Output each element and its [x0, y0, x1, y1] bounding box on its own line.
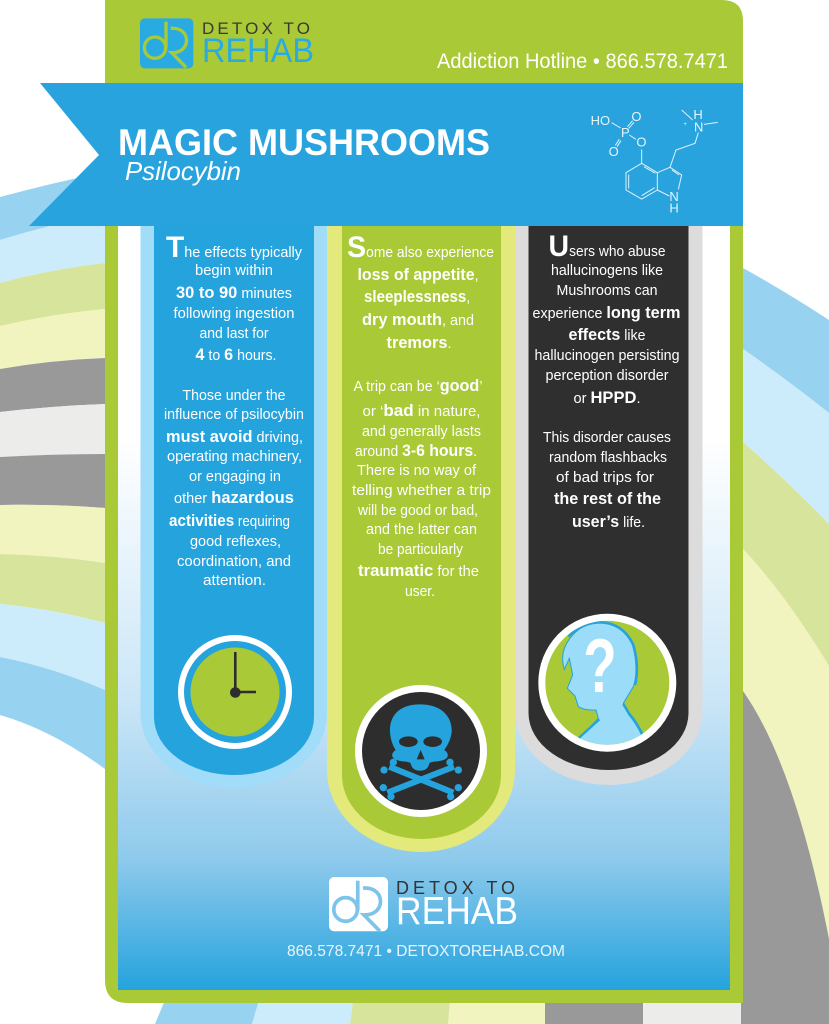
text: symptoms and trips: traumatic for the: [358, 562, 479, 580]
banner ribbon: [29, 83, 743, 226]
text: symptoms and trips: or ‘bad in nature,: [362, 402, 480, 420]
text: symptoms and trips: and generally lasts: [362, 424, 481, 440]
panel: long term effects column: [515, 226, 702, 785]
text: onset and duration: begin within: [195, 263, 273, 279]
text: onset and duration: good reflexes,: [190, 534, 281, 550]
text: onset and duration: 4 to 6 hours.: [196, 346, 276, 364]
text: onset and duration: coordination, and: [177, 554, 291, 570]
chemical structure of psilocybin: +: [683, 122, 687, 128]
text: onset and duration: influence of psilocybin: [164, 407, 304, 423]
chemical structure of psilocybin: H: [693, 107, 703, 122]
text: symptoms and trips: A trip can be ‘good’: [354, 377, 482, 395]
subtitle: Psilocybin: [125, 156, 241, 186]
text: HPPD: Mushrooms can: [556, 283, 658, 299]
text: onset and duration: The effects typically: [166, 231, 303, 264]
text: symptoms and trips: sleeplessness,: [364, 288, 470, 306]
text: symptoms and trips: around 3-6 hours.: [355, 442, 477, 460]
text: symptoms and trips: be particularly: [378, 542, 464, 558]
text: HPPD: [532, 230, 680, 531]
text: symptoms and trips: will be good or bad,: [357, 503, 478, 519]
chemical structure of psilocybin: O: [609, 144, 619, 159]
chemical structure of psilocybin: N: [669, 189, 679, 204]
text: HPPD: the rest of the: [554, 490, 661, 508]
text: HPPD: Users who abuse: [548, 230, 666, 263]
text: symptoms and trips: user.: [405, 584, 435, 600]
text: symptoms and trips: and the latter can: [366, 522, 477, 538]
question mark: ?: [583, 624, 617, 709]
text: HPPD: random flashbacks: [549, 450, 667, 466]
logo mark: [140, 18, 193, 68]
text: symptoms and trips: tremors.: [386, 334, 452, 352]
logo: header Detox to Rehab: [140, 18, 314, 70]
column 1 capsule: [140, 226, 327, 788]
footer logo mark: [329, 877, 388, 931]
text: symptoms and trips: There is no way of: [357, 463, 477, 479]
chemical structure of psilocybin: N: [694, 120, 703, 135]
text: onset and duration: [164, 231, 304, 589]
chemical structure of psilocybin: P: [621, 125, 630, 140]
panel: green card frame: [105, 0, 743, 1003]
icon: skull and crossbones: [358, 688, 484, 814]
column 2 capsule: [327, 226, 515, 852]
text: onset and duration: following ingestion: [174, 306, 294, 322]
text: symptoms and trips: loss of appetite,: [357, 266, 478, 284]
text: HPPD: or HPPD.: [574, 389, 640, 407]
text: HPPD: perception disorder: [546, 368, 669, 384]
text: HPPD: experience long term: [532, 304, 680, 322]
text: symptoms and trips: telling whether a trip: [352, 483, 491, 499]
footer logo: [329, 877, 518, 933]
text: HPPD: This disorder causes: [543, 430, 671, 446]
footer contact line: 866.578.7471 • DETOXTOREHAB.COM: [287, 943, 565, 960]
text: symptoms and trips: Some also experience: [347, 231, 494, 264]
text: onset and duration: and last for: [200, 326, 269, 342]
text: HPPD: of bad trips for: [556, 470, 654, 486]
chemical structure of psilocybin: O: [636, 135, 646, 150]
text: onset and duration: operating machinery,: [167, 449, 302, 465]
column 3 capsule: [515, 226, 702, 785]
text: HPPD: hallucinogens like: [551, 263, 663, 279]
text: symptoms and trips: [347, 231, 494, 600]
chemical structure of psilocybin: H: [669, 201, 679, 216]
panel: effects column: [140, 226, 327, 788]
footer logo wordmark: DETOX TO: [396, 878, 515, 898]
text: HPPD: hallucinogen persisting: [534, 348, 680, 364]
text: onset and duration: activities requiring: [169, 512, 290, 530]
text: symptoms and trips: dry mouth, and: [362, 311, 474, 329]
icon: head with question mark: [542, 617, 673, 757]
text: HPPD: effects like: [568, 326, 646, 344]
logo wordmark: DETOX TO: [202, 19, 310, 38]
chemical structure of psilocybin: HO: [591, 113, 610, 128]
chemical structure of psilocybin: [591, 107, 718, 216]
chemical structure of psilocybin: O: [631, 109, 641, 124]
logo wordmark: REHAB: [202, 32, 314, 70]
icon: clock: [181, 638, 289, 746]
text: onset and duration: attention.: [203, 573, 266, 589]
footer logo wordmark: REHAB: [396, 890, 518, 933]
hotline: Addiction Hotline • 866.578.7471: [437, 50, 728, 73]
panel: inner gradient background: [118, 226, 730, 990]
text: onset and duration: other hazardous: [174, 489, 294, 507]
text: onset and duration: or engaging in: [189, 469, 281, 485]
text: HPPD: user’s life.: [572, 513, 645, 531]
text: onset and duration: must avoid driving,: [166, 428, 303, 446]
text: onset and duration: Those under the: [182, 388, 286, 404]
text: onset and duration: 30 to 90 minutes: [176, 284, 292, 302]
title: MAGIC MUSHROOMS: [118, 122, 490, 163]
panel: side effects column: [327, 226, 515, 852]
